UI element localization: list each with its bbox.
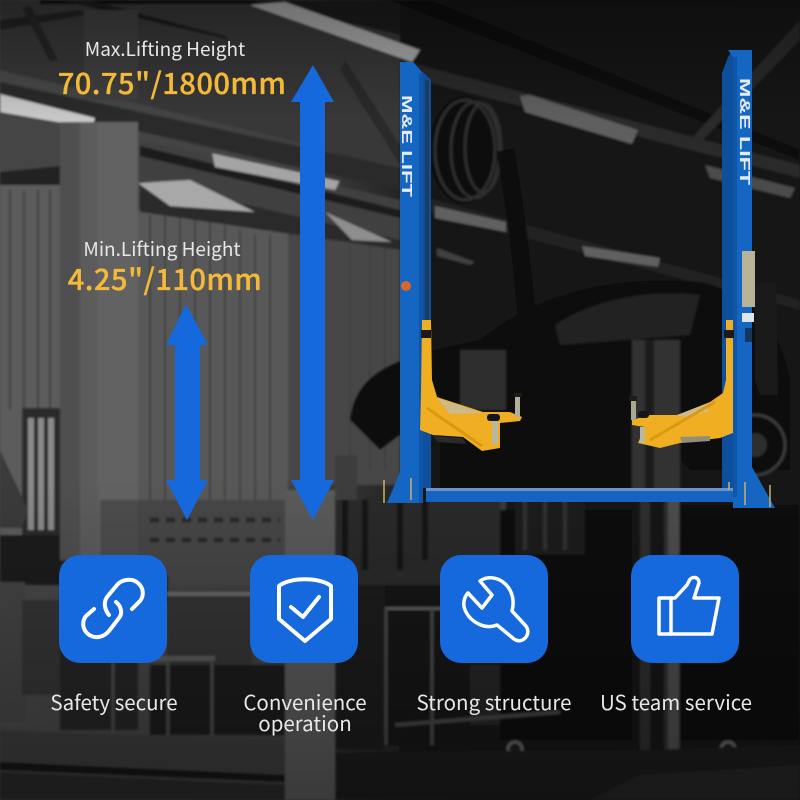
caption: safety secure: Safety secure — [50, 686, 178, 716]
window on left wall — [22, 408, 60, 536]
power unit — [755, 283, 778, 395]
caption: convenience operation: operation — [258, 707, 352, 737]
anchor bolts — [384, 478, 770, 507]
brand label: M&E LIFT — [398, 95, 415, 197]
workshop clutter — [0, 535, 60, 585]
car silhouette — [350, 280, 790, 470]
icon: wrench, strong structure — [440, 555, 548, 663]
value: max lifting height: 70.75"/1800mm — [58, 61, 286, 103]
right post — [722, 50, 778, 508]
label: max lifting height heading: Max.Lifting Height — [85, 35, 245, 62]
caption: convenience operation — [243, 686, 367, 737]
warning sticker — [742, 251, 755, 307]
icon: thumbs up, US team service — [631, 555, 739, 663]
right yellow carriage and arms — [629, 320, 734, 448]
left yellow carriage and arms — [420, 320, 522, 451]
emblem — [401, 281, 411, 291]
ceiling lights — [250, 2, 420, 62]
icon: shield, convenience operation — [250, 555, 358, 663]
label: min lifting height heading: Min.Lifting Height — [83, 235, 241, 262]
base crossbar — [426, 488, 733, 502]
value: min lifting height: 4.25"/110mm — [68, 257, 262, 299]
ceiling structure — [0, 0, 400, 170]
corrugated wall — [0, 182, 60, 542]
left post — [387, 62, 431, 503]
pillars — [60, 122, 138, 560]
brand label: M&E LIFT — [736, 78, 753, 185]
icon: link, safety secure — [59, 555, 167, 663]
caption: strong structure: Strong structure — [417, 686, 571, 716]
caption: convenience operation: Convenience — [243, 686, 367, 716]
caption: US team service: US team service — [600, 686, 752, 716]
hose reel and hose — [429, 96, 501, 204]
floor — [0, 730, 285, 800]
